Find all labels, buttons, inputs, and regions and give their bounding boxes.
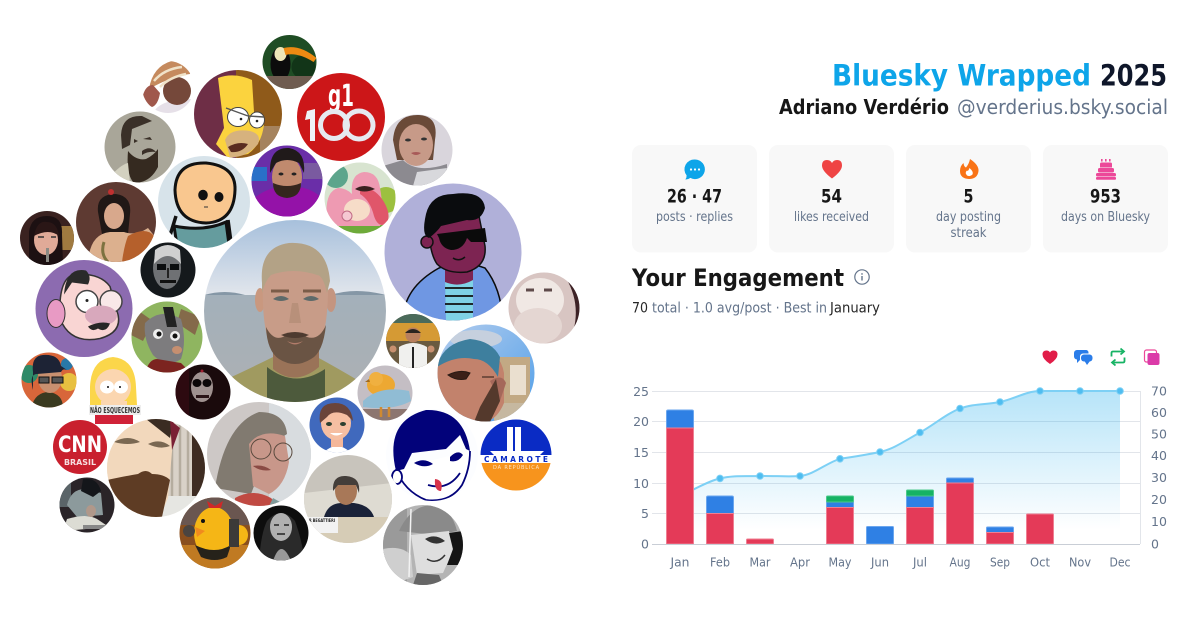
avatar: anime woman	[20, 211, 75, 266]
avatar: yellow robot chick	[179, 497, 251, 569]
avatar: dark mask	[140, 242, 196, 298]
avatar: young woman in bed	[381, 114, 453, 186]
line points	[717, 388, 1123, 482]
display name and handle	[779, 95, 1168, 119]
avatar: South Park character	[89, 357, 141, 424]
avatar: man with blue hair	[437, 324, 535, 422]
avatar cluster	[20, 35, 580, 585]
left axis labels: 0	[641, 536, 649, 552]
month labels: Dec	[1110, 554, 1131, 570]
month labels: Jun	[870, 554, 889, 570]
avatar: chick in blue dress	[357, 365, 413, 421]
panel: posts and replies: 26 · 47	[667, 186, 722, 208]
avatar: CNN Brasil logo	[53, 420, 107, 474]
avatar: Lickitung	[324, 162, 399, 234]
month labels: Jan	[670, 554, 690, 570]
icon: chat bubble	[684, 159, 705, 180]
panel: days on Bluesky: 953	[1090, 186, 1121, 208]
panel: likes received	[769, 145, 894, 252]
panel: likes received: 54	[821, 186, 842, 208]
engagement summary: total · 1.0 avg/post · Best in	[652, 300, 827, 316]
avatar: CNN Brasil logo: CNN	[58, 433, 102, 458]
avatar: man in purple shirt	[251, 145, 323, 217]
right axis labels: 20	[1151, 492, 1167, 507]
panel: days on Bluesky	[1043, 145, 1168, 252]
title: 2025	[1100, 58, 1167, 92]
left axis labels: 20	[633, 414, 649, 429]
avatar: CNN Brasil logo: BRASIL	[64, 458, 96, 467]
avatar: Camarote da República logo: CAMAROTE	[484, 455, 548, 464]
panel: posting streak: streak	[950, 226, 987, 241]
avatar: person with hat and glasses	[20, 352, 78, 408]
icon: info	[855, 270, 869, 284]
combined bar and line chart	[633, 384, 1167, 570]
month labels: Sep	[990, 554, 1010, 570]
heading: Your Engagement: Your Engagement	[631, 264, 844, 292]
grid lines	[652, 391, 1140, 544]
avatar: black and white woman	[253, 505, 309, 561]
avatar: older woman with glasses	[207, 402, 311, 506]
cumulative line	[680, 391, 1120, 496]
avatar: cartoon boy on blue	[309, 397, 365, 453]
avatar: Camarote da República logo	[480, 419, 552, 491]
panel: posting streak: day posting	[936, 210, 1001, 225]
icon: legend quotes	[1144, 350, 1160, 365]
avatar: purple cartoon with glasses	[35, 260, 133, 358]
avatar: speaker at microphone: R BEGATTIERI	[309, 518, 335, 524]
avatar: woman with skull makeup	[175, 364, 231, 420]
icon: legend replies	[1074, 350, 1092, 365]
engagement summary: January	[829, 300, 880, 316]
panel: posting streak	[906, 145, 1031, 252]
avatar: g1 100 logo	[297, 73, 385, 161]
right axis labels: 0	[1151, 536, 1159, 552]
display name and handle: Adriano Verdério	[779, 95, 949, 119]
left axis labels: 5	[641, 506, 649, 521]
panel: posting streak: 5	[964, 186, 974, 208]
panel: likes received: likes received	[794, 210, 869, 225]
avatar: man in white jacket	[386, 314, 440, 368]
month labels: Nov	[1069, 554, 1092, 570]
month labels: Feb	[710, 554, 730, 570]
avatar: blurry pet	[508, 272, 580, 344]
right axis labels: 10	[1151, 514, 1167, 529]
avatar: gray cartoon with hat	[383, 505, 463, 585]
avatar: painted woman	[76, 182, 156, 262]
left axis labels: 15	[633, 445, 649, 460]
right axis labels: 60	[1151, 405, 1167, 420]
cumulative area	[680, 391, 1120, 544]
left axis labels	[633, 384, 649, 552]
month labels: Jul	[912, 554, 927, 570]
month labels: May	[828, 554, 852, 570]
x axis baseline	[652, 544, 1140, 546]
avatar: main selfie at the sea	[204, 220, 386, 402]
month labels: Mar	[750, 554, 771, 570]
avatar: g1 100 logo: g1	[328, 79, 354, 114]
left axis labels: 10	[633, 476, 649, 491]
engagement summary: 70	[632, 300, 648, 316]
month labels: Aug	[950, 554, 970, 570]
title: Bluesky Wrapped	[832, 58, 1091, 92]
avatar: gray rat mascot	[131, 301, 203, 373]
right axis labels: 30	[1151, 470, 1167, 485]
avatar: toucan	[262, 35, 316, 89]
display name and handle: @verderius.bsky.social	[957, 95, 1168, 119]
right axis labels	[1151, 384, 1167, 552]
avatar: guitarist	[59, 477, 115, 533]
avatar: kid with patterned cap	[142, 60, 194, 113]
avatar: South Park character: NÃO ESQUECEMOS	[90, 405, 140, 415]
avatar: blue cartoon licking lips	[391, 410, 471, 501]
avatar: Homer Simpson	[194, 70, 282, 158]
panel: days on Bluesky: days on Bluesky	[1061, 210, 1150, 225]
icon: flame	[960, 159, 979, 179]
month labels: Apr	[790, 554, 811, 570]
avatar: bearded man stencil	[104, 111, 176, 183]
month labels: Oct	[1030, 554, 1050, 570]
panel: posts and replies: posts · replies	[656, 210, 733, 225]
avatar: bearded man close-up	[107, 419, 205, 517]
right axis labels: 40	[1151, 448, 1167, 463]
icon: cake	[1096, 159, 1116, 180]
panel: posts and replies	[632, 145, 757, 252]
avatar: speaker at microphone	[304, 455, 392, 543]
icon: legend reposts	[1112, 348, 1124, 366]
right axis labels: 70	[1151, 384, 1167, 398]
chart legend	[1042, 348, 1160, 366]
icon: heart	[822, 160, 842, 178]
avatar: Cyanide and Happiness character	[158, 156, 250, 252]
left axis labels: 25	[633, 384, 649, 399]
right axis labels: 50	[1151, 426, 1167, 442]
avatar: Camarote da República logo: DA REPÚBLICA	[493, 464, 540, 471]
month labels	[670, 554, 1131, 570]
avatar: cartoon man with sunglasses	[384, 183, 522, 321]
stacked bars	[666, 410, 1054, 544]
icon: legend likes	[1042, 350, 1058, 364]
